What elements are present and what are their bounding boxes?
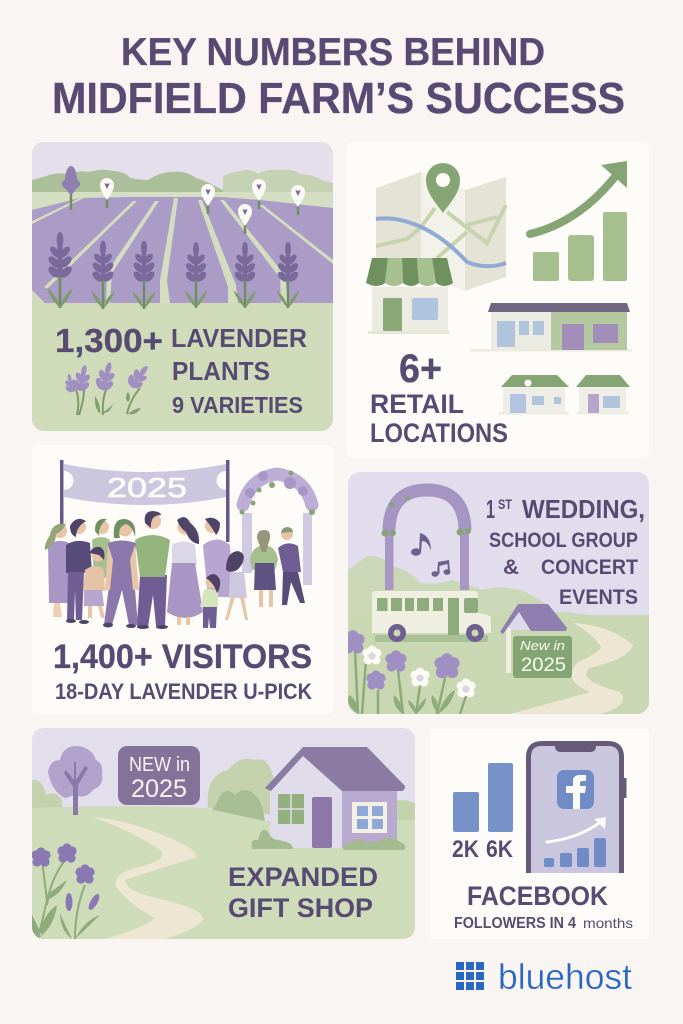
badge: new in 2025: 2025 xyxy=(131,775,187,803)
label: events text: EVENTS xyxy=(559,586,638,609)
panel: retail locations xyxy=(347,142,649,458)
winding path xyxy=(510,623,633,714)
panel: events xyxy=(341,472,649,714)
label: retail locations: LOCATIONS xyxy=(370,418,508,448)
child in tan top xyxy=(83,547,105,618)
icon: small shop one xyxy=(499,375,569,414)
label: expanded gift shop: EXPANDED xyxy=(228,862,378,892)
label: expanded gift shop xyxy=(228,862,378,923)
label: events text: CONCERT xyxy=(541,556,638,579)
panel: expanded gift shop xyxy=(31,728,415,939)
small child xyxy=(200,574,220,628)
label: 18-day lavender u-pick: 18-DAY LAVENDER U-PICK xyxy=(55,679,312,704)
visitor man in green shirt xyxy=(135,511,170,629)
label: lavender plants: PLANTS xyxy=(172,356,270,386)
visitor purple back xyxy=(203,518,233,597)
label: followers in 4 months: FOLLOWERS IN 4 xyxy=(454,915,576,932)
label: events text: 1 xyxy=(486,494,495,524)
treeline xyxy=(32,170,228,193)
chart: rising bars with arrow xyxy=(530,161,627,281)
label: events text: WEDDING, xyxy=(522,494,645,524)
icon: phone with facebook xyxy=(528,743,626,873)
title xyxy=(52,31,625,123)
meadow xyxy=(32,806,415,939)
bar chart: 2K to 6K: 2K xyxy=(452,836,480,863)
bar chart: 2K to 6K: 6K xyxy=(486,836,514,863)
label: lavender plants: 9 VARIETIES xyxy=(172,392,303,418)
flower meadow xyxy=(341,630,476,714)
visitor green top xyxy=(92,519,110,578)
badge: new in 2025: 2025 xyxy=(521,655,566,676)
label: expanded gift shop: GIFT SHOP xyxy=(228,893,373,923)
icon: gift shop house xyxy=(252,747,405,850)
hills xyxy=(348,556,546,612)
stat: 1,300+: 1,300+ xyxy=(55,322,163,359)
winding path xyxy=(92,817,203,939)
logo: bluehost: bluehost xyxy=(498,956,632,997)
label: events text: & xyxy=(503,556,519,579)
label: events text: SCHOOL GROUP xyxy=(489,529,638,552)
badge: new in 2025: New in xyxy=(520,638,565,653)
label: lavender plants: LAVENDER xyxy=(171,323,307,353)
girl with long hair xyxy=(225,551,248,620)
icon: lavender flowers xyxy=(31,843,102,939)
visitor woman in skirt xyxy=(167,517,203,625)
icon: long shop building xyxy=(470,303,632,352)
visitor dark shirt xyxy=(66,519,92,624)
icon: small house sign xyxy=(500,604,567,673)
couple man xyxy=(278,527,305,605)
stat: 6+: 6+ xyxy=(399,347,442,391)
illustration: crowd of visitors xyxy=(45,511,305,629)
panel: lavender plants xyxy=(32,142,333,431)
icon: school bus xyxy=(372,591,491,642)
distant lavender stalk xyxy=(62,166,80,210)
visitor left woman xyxy=(45,524,70,617)
label: events text: ST xyxy=(498,496,512,512)
icon: floral arch xyxy=(382,490,471,590)
icon: storefront xyxy=(366,258,453,334)
icon: folded map xyxy=(376,163,506,291)
banner 2025 xyxy=(60,460,230,542)
heart markers xyxy=(100,178,305,234)
icon: lavender sprigs xyxy=(62,360,155,415)
banner 2025: 2025 xyxy=(107,472,187,503)
stat: 1,400+ visitors: 1,400+ VISITORS xyxy=(53,638,312,676)
label: lavender plants xyxy=(171,323,307,418)
title: KEY NUMBERS BEHIND xyxy=(121,31,545,74)
panel: visitors xyxy=(32,445,333,714)
couple woman xyxy=(250,530,278,607)
lavender rows xyxy=(32,197,333,303)
icon: small shop two xyxy=(576,375,630,414)
label: events text xyxy=(486,494,645,609)
title: MIDFIELD FARM’S SUCCESS xyxy=(52,74,625,123)
icon: purple tree xyxy=(48,746,102,815)
label: facebook: FACEBOOK xyxy=(467,881,608,911)
visitor purple jumpsuit xyxy=(103,519,139,628)
bar chart: 2K to 6K xyxy=(452,763,514,863)
panel: facebook followers xyxy=(430,729,649,939)
badge: new in 2025 xyxy=(513,636,572,678)
foreground lavender plants xyxy=(46,232,300,309)
label: retail locations xyxy=(370,389,508,448)
background bushes xyxy=(32,780,62,810)
label: followers in 4 months: months xyxy=(583,915,633,931)
icon: music notes xyxy=(411,533,450,577)
badge: new in 2025 xyxy=(118,746,200,805)
badge: new in 2025: NEW in xyxy=(129,754,190,776)
label: retail locations: RETAIL xyxy=(370,389,464,419)
green gaps between rows xyxy=(32,198,333,303)
icon: floral arch xyxy=(240,470,315,585)
